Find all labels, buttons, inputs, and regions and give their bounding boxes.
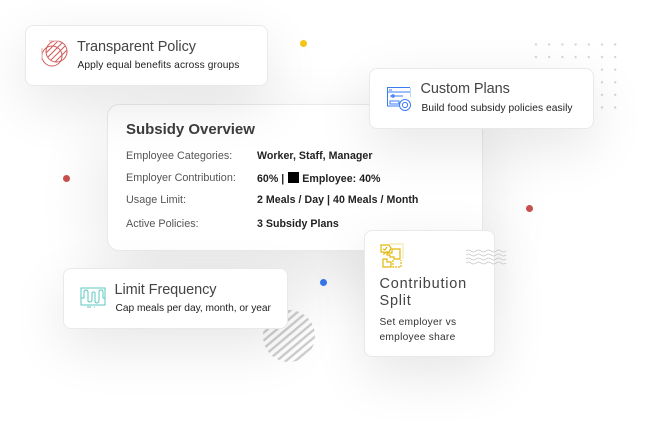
card description: Cap meals per day, month, or year [116, 303, 271, 314]
red dot right [526, 205, 533, 212]
icon: hatched circles [42, 40, 68, 66]
icon: frequency wave [80, 288, 106, 308]
card description: Apply equal benefits across groups [78, 60, 239, 71]
card description: employee share [380, 332, 456, 343]
row value: active policies: 3 Subsidy Plans [257, 218, 339, 230]
decorative dot grid [534, 43, 616, 109]
panel: subsidy overview [107, 104, 483, 251]
icon: puzzle pieces [380, 243, 404, 268]
row label: employer contribution: Employer Contribution: [126, 172, 236, 184]
panel: custom plans [369, 68, 594, 129]
heading: subsidy overview: Subsidy Overview [126, 121, 255, 138]
card title: Custom Plans [420, 81, 510, 97]
card title: Contribution Split [380, 276, 467, 309]
card title: Transparent Policy [77, 39, 196, 55]
striped circle [263, 310, 315, 362]
card description [380, 317, 456, 343]
panel: limit frequency [63, 268, 288, 329]
red dot left [63, 175, 70, 182]
card description: Build food subsidy policies easily [422, 103, 573, 114]
card description: Set employer vs [380, 317, 456, 328]
row label: active policies: Active Policies: [126, 218, 199, 230]
row label: employee categories: Employee Categories: [126, 150, 232, 162]
panel: transparent policy [25, 25, 268, 86]
yellow dot [300, 40, 307, 47]
card title: Limit Frequency [114, 282, 216, 298]
row label: usage limit: Usage Limit: [126, 194, 186, 206]
icon: settings window [387, 87, 411, 111]
decorative wavy lines [466, 250, 506, 264]
row value: employer contribution: 60% | Employee: 40% [257, 173, 381, 185]
row value: usage limit: 2 Meals / Day | 40 Meals / Month [257, 194, 418, 206]
row value: employee categories: Worker, Staff, Manager [257, 150, 372, 162]
panel: contribution split [364, 230, 495, 357]
blue dot [320, 279, 327, 286]
